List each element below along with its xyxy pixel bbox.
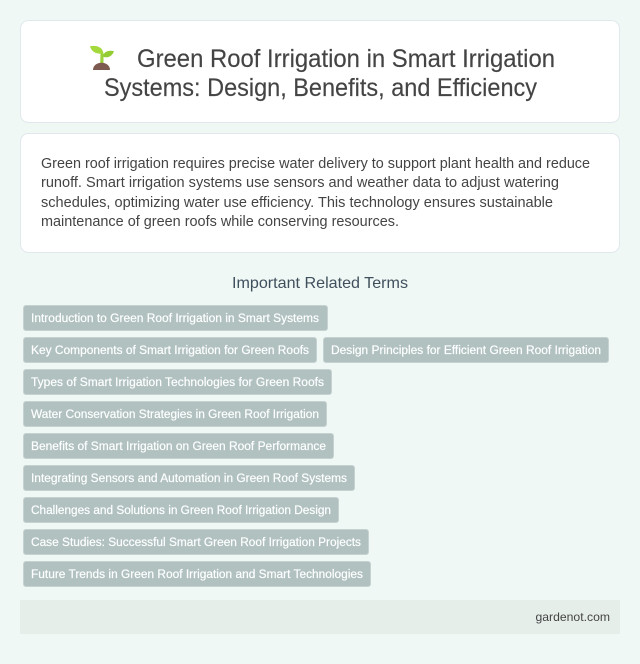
text block: description: runoff. Smart irrigation systems use sensors and weather data to adjust watering: [41, 175, 559, 191]
tag 2: [24, 338, 316, 362]
tag 3: [324, 338, 608, 362]
text block: description: [41, 156, 590, 230]
panel: description card: [20, 134, 620, 252]
tag 8: [24, 498, 338, 522]
tag 4: Types of Smart Irrigation Technologies for Green Roofs: [31, 375, 324, 389]
tag 4: [24, 370, 332, 394]
footer text: source: gardenot.com: [536, 610, 610, 624]
tag 9: [24, 530, 368, 554]
tag 3: Design Principles for Efficient Green Roof Irrigation: [331, 343, 601, 357]
tag 10: Future Trends in Green Roof Irrigation and Smart Technologies: [31, 567, 363, 581]
tag 10: [24, 562, 370, 586]
tag 5: [24, 402, 326, 426]
tag 7: Integrating Sensors and Automation in Green Roof Systems: [31, 471, 347, 485]
text block: description: schedules, optimizing water use efficiency. This technology ensures sustainable: [41, 195, 553, 211]
tag 6: [24, 434, 334, 458]
title: Green Roof Irrigation in Smart Irrigation: [137, 45, 555, 73]
icon: seedling: [90, 46, 114, 70]
tag 5: Water Conservation Strategies in Green Roof Irrigation: [31, 407, 319, 421]
title: [104, 45, 555, 102]
footer: [20, 600, 620, 634]
text block: description: Green roof irrigation requires precise water delivery to support plant health and reduce: [41, 156, 590, 172]
tag 9: Case Studies: Successful Smart Green Roof Irrigation Projects: [31, 535, 361, 549]
tag 8: Challenges and Solutions in Green Roof Irrigation Design: [31, 503, 331, 517]
heading: important related terms: Important Related Terms: [232, 275, 408, 292]
panel: title card: [20, 20, 620, 122]
tag 1: Introduction to Green Roof Irrigation in Smart Systems: [31, 311, 319, 325]
text block: description: maintenance of green roofs while conserving resources.: [41, 214, 399, 230]
tag 7: [24, 466, 354, 490]
tag 2: Key Components of Smart Irrigation for Green Roofs: [31, 343, 309, 357]
tag 6: Benefits of Smart Irrigation on Green Roof Performance: [31, 439, 326, 453]
list: related term tags: [24, 306, 608, 586]
title: Systems: Design, Benefits, and Efficiency: [104, 74, 537, 102]
tag 1: [24, 306, 328, 330]
